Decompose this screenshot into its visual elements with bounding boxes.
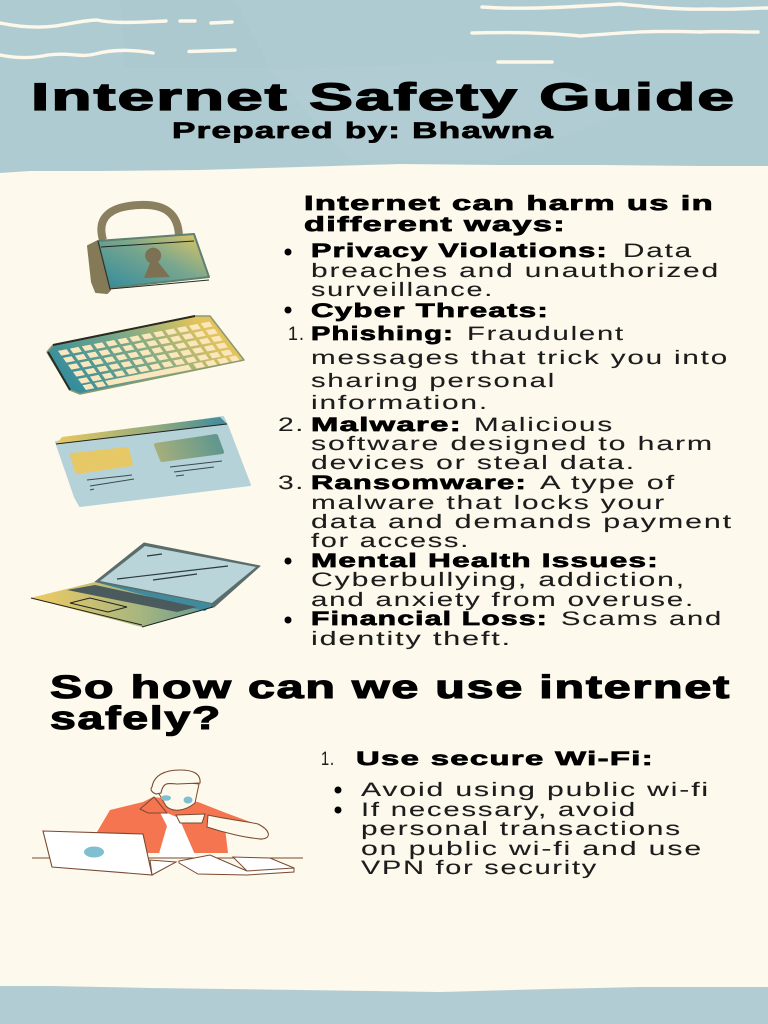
numbered item: ransomware: 3. <box>278 472 305 494</box>
numbered item: malware: software designed to harm <box>311 433 714 455</box>
list: cyber threats: Cyber Threats: <box>311 300 549 322</box>
list: financial loss: Scams and <box>561 608 723 630</box>
icon: laptop <box>30 543 260 627</box>
heading: how to use internet safely: So how can we use internet <box>50 669 731 705</box>
numbered item: ransomware: Ransomware: <box>311 472 527 494</box>
icon: browser window <box>56 417 250 506</box>
illustration: person at laptop <box>32 770 303 875</box>
list: vpn advice <box>334 799 703 879</box>
numbered item: ransomware: for access. <box>311 530 470 552</box>
numbered item: malware: devices or steal data. <box>311 452 636 474</box>
list: privacy violations: Privacy Violations: <box>311 240 608 262</box>
list: vpn advice: If necessary, avoid <box>361 799 637 821</box>
numbered item: phishing: Phishing: <box>311 323 454 345</box>
heading: internet can harm us <box>304 192 714 236</box>
decorative brush lines <box>0 4 768 62</box>
list: cyber threats <box>284 300 549 322</box>
bottom banner background <box>0 986 768 1024</box>
numbered item: ransomware: A type of <box>540 472 676 494</box>
numbered item: phishing: 1. <box>288 323 305 345</box>
heading: how to use internet safely <box>50 669 731 736</box>
list: financial loss: Financial Loss: <box>311 608 548 630</box>
list: privacy violations: breaches and unauthorized <box>311 260 720 282</box>
heading: how to use internet safely: safely? <box>50 700 222 736</box>
heading: internet can harm us: Internet can harm us in <box>304 192 714 215</box>
top banner background <box>0 0 768 173</box>
numbered item: phishing: information. <box>311 392 489 414</box>
list: vpn advice: personal transactions <box>361 818 682 840</box>
list: vpn advice: on public wi-fi and use <box>361 838 703 860</box>
list: mental health issues: Mental Health Issues: <box>311 550 659 572</box>
list: privacy violations <box>284 240 720 301</box>
numbered item: ransomware <box>278 472 733 552</box>
numbered item: ransomware: data and demands payment <box>311 511 733 533</box>
numbered item: malware <box>278 414 714 474</box>
numbered item: ransomware: malware that locks your <box>311 492 666 514</box>
numbered item: phishing: sharing personal <box>311 370 556 392</box>
icon: keyboard <box>47 316 244 394</box>
list: mental health issues <box>284 550 695 611</box>
numbered item: phishing: Fraudulent <box>467 323 625 345</box>
numbered item: malware: 2. <box>278 414 305 436</box>
list: mental health issues: Cyberbullying, addiction, <box>311 569 686 591</box>
numbered item: phishing <box>288 323 729 414</box>
icon: padlock <box>88 205 209 293</box>
list: avoid public wi-fi: Avoid using public wi-fi <box>361 779 710 801</box>
list: avoid public wi-fi <box>334 779 710 801</box>
numbered item: malware: Malicious <box>474 414 614 436</box>
heading: internet can harm us: different ways: <box>304 213 566 236</box>
step heading: use secure wi-fi <box>321 748 654 770</box>
step heading: use secure wi-fi: Use secure Wi-Fi: <box>356 748 654 770</box>
list: mental health issues: and anxiety from overuse. <box>311 589 695 611</box>
numbered item: malware: Malware: <box>311 414 462 436</box>
list: vpn advice: VPN for security <box>361 857 598 879</box>
list: financial loss: identity theft. <box>311 628 512 650</box>
list: privacy violations: surveillance. <box>311 279 494 301</box>
list: financial loss <box>284 608 723 650</box>
subtitle: prepared by: Prepared by: Bhawna <box>172 118 554 143</box>
list: privacy violations: Data <box>623 240 693 262</box>
step heading: use secure wi-fi: 1. <box>321 748 335 770</box>
title: Internet Safety Guide <box>31 76 736 119</box>
numbered item: phishing: messages that trick you into <box>311 347 729 369</box>
